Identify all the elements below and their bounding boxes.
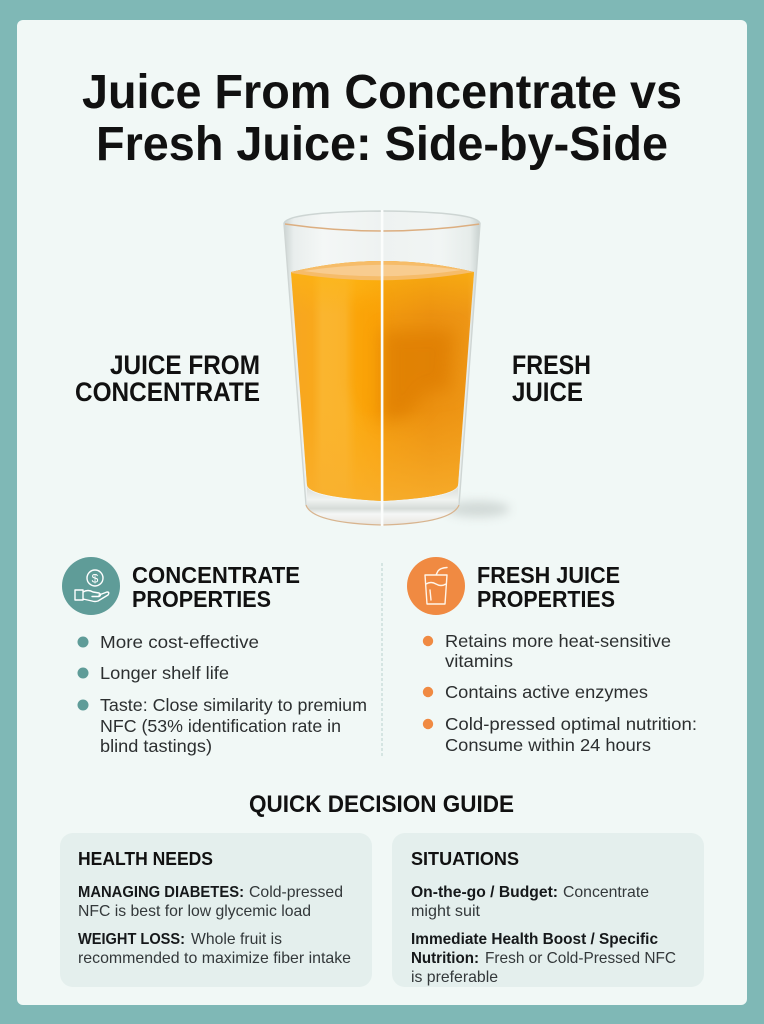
- label: fresh juice: JUICE: [512, 377, 583, 407]
- panel: situations: [392, 833, 704, 987]
- list: fresh juice properties: Consume within 24 hours: [445, 735, 651, 755]
- list: fresh juice properties: vitamins: [445, 651, 513, 671]
- panel: health needs: Cold-pressed: [249, 884, 343, 901]
- label: fresh juice: FRESH: [512, 350, 591, 380]
- title: Juice From Concentrate vs: [82, 66, 682, 119]
- panel: health needs: HEALTH NEEDS: [78, 848, 213, 869]
- panel: situations: is preferable: [411, 969, 498, 986]
- panel: situations: might suit: [411, 903, 481, 920]
- heading: quick decision guide: QUICK DECISION GUIDE: [249, 791, 514, 818]
- panel: health needs: NFC is best for low glycemic load: [78, 903, 311, 920]
- label: juice from concentrate: JUICE FROM: [110, 350, 260, 380]
- heading: concentrate properties: [132, 562, 300, 612]
- icon: hand holding coin: [62, 557, 120, 615]
- icon: hand holding coin: $: [92, 572, 99, 586]
- panel: situations: Nutrition:: [411, 950, 479, 967]
- heading: concentrate properties: CONCENTRATE: [132, 562, 300, 588]
- panel: situations: On-the-go / Budget:: [411, 884, 558, 901]
- label: fresh juice: [512, 350, 591, 407]
- title: Fresh Juice: Side-by-Side: [96, 118, 668, 171]
- panel: situations: Concentrate: [563, 884, 649, 901]
- heading: fresh juice properties: FRESH JUICE: [477, 562, 620, 588]
- label: juice from concentrate: [75, 350, 260, 407]
- list: fresh juice properties: Retains more heat-sensitive: [445, 631, 671, 651]
- list: concentrate properties: blind tastings): [100, 736, 212, 756]
- list: concentrate properties: Taste: Close similarity to premium: [100, 695, 367, 715]
- list: concentrate properties: [78, 632, 367, 756]
- list: concentrate properties: NFC (53% identification rate in: [100, 716, 341, 736]
- glass of orange juice split in two halves: [284, 210, 510, 526]
- panel: health needs: recommended to maximize fiber intake: [78, 950, 351, 967]
- list: concentrate properties: Longer shelf life: [100, 663, 229, 683]
- title: [82, 66, 682, 171]
- panel: situations: Immediate Health Boost / Specific: [411, 931, 658, 948]
- list: fresh juice properties: Contains active enzymes: [445, 682, 648, 702]
- list: fresh juice properties: Cold-pressed optimal nutrition:: [445, 714, 697, 734]
- heading: concentrate properties: PROPERTIES: [132, 586, 271, 612]
- label: juice from concentrate: CONCENTRATE: [75, 377, 260, 407]
- panel: health needs: [60, 833, 372, 987]
- panel: health needs: MANAGING DIABETES:: [78, 884, 244, 901]
- list: concentrate properties: More cost-effective: [100, 632, 259, 652]
- heading: fresh juice properties: PROPERTIES: [477, 586, 615, 612]
- panel: situations: Fresh or Cold-Pressed NFC: [485, 950, 676, 967]
- panel: situations: SITUATIONS: [411, 848, 519, 869]
- panel: health needs: Whole fruit is: [191, 931, 282, 948]
- icon: juice cup with straw: [407, 557, 465, 615]
- panel: health needs: WEIGHT LOSS:: [78, 931, 185, 948]
- heading: fresh juice properties: [477, 562, 620, 612]
- list: fresh juice properties: [423, 631, 697, 755]
